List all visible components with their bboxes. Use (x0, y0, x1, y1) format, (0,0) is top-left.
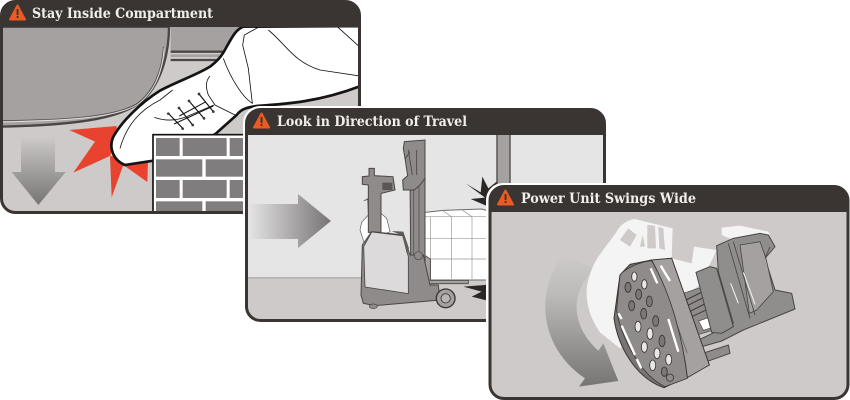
front block (696, 267, 733, 333)
header bar (490, 186, 848, 212)
wheel (436, 289, 455, 308)
panel: power unit swings wide (486, 183, 850, 400)
panel: look in direction of travel (243, 106, 608, 324)
icon: black impact burst bottom (464, 284, 486, 300)
brick wall (153, 135, 246, 215)
mast (410, 178, 426, 262)
icon: direction arrow (248, 194, 331, 248)
heading: Stay Inside Compartment (32, 6, 214, 22)
chassis (361, 232, 440, 306)
icon: warning triangle (10, 6, 25, 20)
cable bundle (684, 288, 711, 335)
icon: red impact burst (69, 126, 148, 197)
heading: Power Unit Swings Wide (521, 191, 696, 207)
reach truck (360, 140, 468, 309)
compartment seat (0, 27, 243, 127)
white ghost of swing path (587, 219, 770, 348)
rear frame (695, 233, 795, 348)
header bar (2, 2, 360, 27)
pallet load boxes (426, 208, 486, 280)
power unit disc (614, 258, 709, 388)
icon: black impact burst top (466, 177, 497, 208)
overhead guard (362, 168, 395, 232)
icon: warning triangle (498, 190, 513, 204)
shoe and trouser leg (111, 26, 361, 165)
rod (703, 345, 730, 362)
drive mechanism (683, 233, 795, 362)
operator (360, 198, 390, 243)
forks and carriage (426, 255, 469, 284)
panel: stay inside compartment (0, 0, 362, 215)
heading: Look in Direction of Travel (277, 114, 467, 130)
icon: down arrow (12, 143, 66, 205)
header bar (246, 110, 604, 135)
icon: curved swing arrow (545, 275, 618, 387)
icon: warning triangle (254, 114, 269, 128)
pole (497, 130, 510, 190)
